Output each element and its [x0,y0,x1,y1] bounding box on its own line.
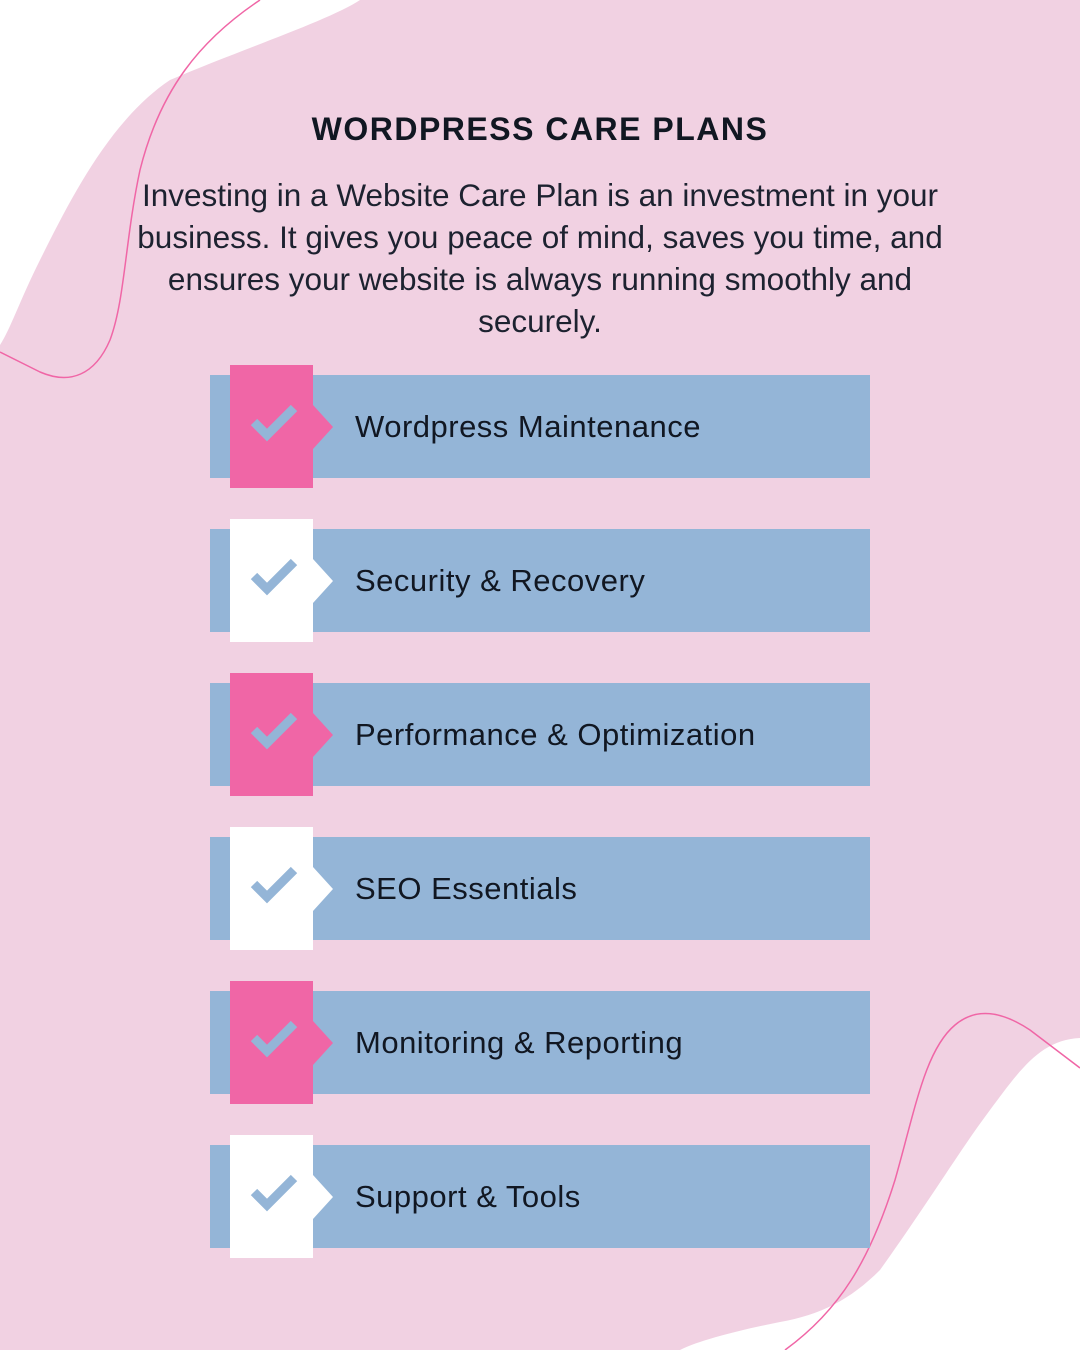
row: Performance & Optimization [210,673,870,796]
row: SEO Essentials [210,827,870,950]
row: Monitoring & Reporting: Monitoring & Reporting [355,1025,683,1060]
icon: white check box [230,519,333,642]
row: Wordpress Maintenance [210,365,870,488]
row: Security & Recovery [210,519,870,642]
icon: pink check box [230,981,333,1104]
icon: white check box [230,827,333,950]
row: Wordpress Maintenance: Wordpress Maintenance [355,409,701,444]
icon: pink check box [230,365,333,488]
row: SEO Essentials: SEO Essentials [355,871,577,906]
row: Performance & Optimization: Performance & Optimization [355,717,756,752]
icon: pink check box [230,673,333,796]
title: WORDPRESS CARE PLANS [312,111,768,147]
icon: white check box [230,1135,333,1258]
row: Monitoring & Reporting [210,981,870,1104]
row: Support & Tools: Support & Tools [355,1179,581,1214]
row: Support & Tools [210,1135,870,1258]
intro text: Investing in a Website Care Plan is an investment in your business. It gives you peace of mind, saves you time, and ensures your website is always running smoothly and securely. [137,177,943,339]
row: Security & Recovery: Security & Recovery [355,563,645,598]
